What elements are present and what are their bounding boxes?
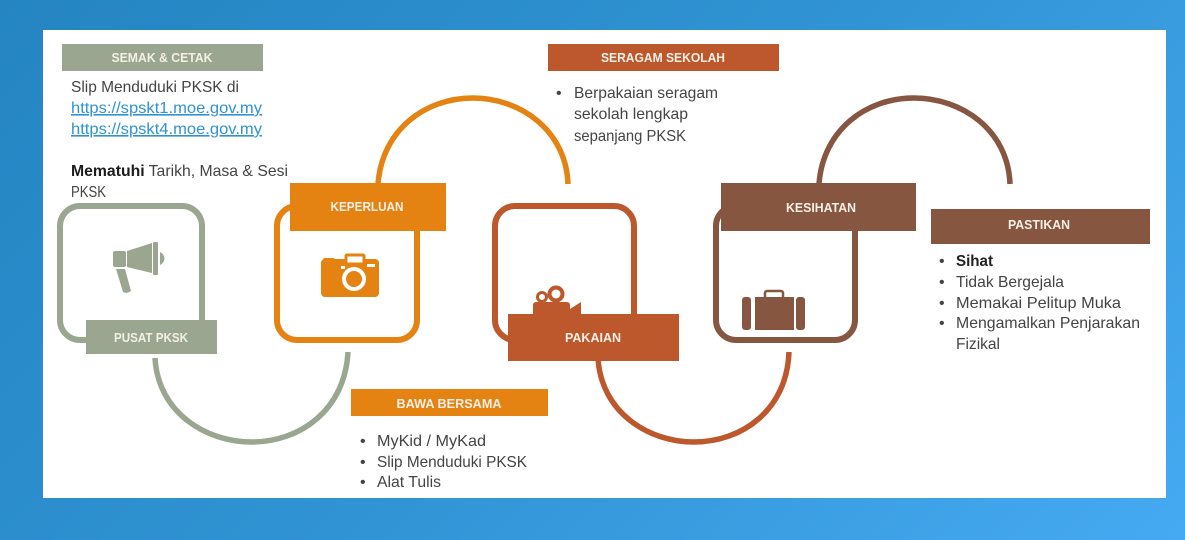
text: health checklist: Mengamalkan Penjarakan	[956, 315, 1140, 332]
label box: Pakaian: PAKAIAN	[565, 330, 621, 345]
card outline: brown	[716, 206, 855, 340]
block: Bawa Bersama	[351, 389, 548, 491]
text: slip links: Slip Menduduki PKSK di	[71, 79, 239, 96]
heading: Semak & Cetak	[62, 44, 263, 71]
heading: Seragam Sekolah: SERAGAM SEKOLAH	[601, 50, 725, 65]
text: health checklist: •	[939, 315, 945, 332]
text: health checklist: •	[939, 253, 945, 270]
label box: Kesihatan	[721, 183, 916, 231]
heading: Semak & Cetak: SEMAK & CETAK	[112, 50, 213, 65]
text: health checklist: Memakai Pelitup Muka	[956, 295, 1121, 312]
text: health checklist: Sihat	[956, 253, 994, 270]
card outline: rust	[495, 206, 634, 340]
heading: Bawa Bersama: BAWA BERSAMA	[396, 396, 502, 411]
heading: Pastikan	[931, 209, 1150, 244]
text: uniform note: sekolah lengkap	[574, 106, 688, 123]
text: slip links: https://spskt4.moe.gov.my	[71, 121, 262, 138]
text: health checklist: Fizikal	[956, 336, 1000, 353]
panel: Kesihatan	[716, 183, 916, 340]
icon: camera	[321, 255, 379, 297]
heading: Bawa Bersama	[351, 389, 548, 416]
label box: Pusat PKSK	[86, 320, 217, 354]
block: Pastikan	[931, 209, 1150, 353]
card outline: green	[60, 206, 202, 340]
label box: Pusat PKSK: PUSAT PKSK	[114, 330, 189, 345]
text: items to bring: •	[360, 474, 366, 491]
icon: film camera	[533, 288, 581, 318]
text: health checklist	[939, 253, 1140, 353]
label box: Kesihatan: KESIHATAN	[786, 200, 856, 215]
text: uniform note: •	[556, 85, 562, 102]
text: items to bring: Slip Menduduki PKSK	[377, 454, 527, 471]
connector arc: brown	[819, 98, 1010, 184]
label box: Keperluan: KEPERLUAN	[330, 199, 404, 214]
text: health checklist: •	[939, 295, 945, 312]
text: slip links: https://spskt1.moe.gov.my	[71, 100, 262, 117]
panel: Keperluan	[277, 183, 446, 340]
text: items to bring	[360, 433, 527, 491]
connector arc: rust	[598, 352, 789, 442]
text: uniform note: Berpakaian seragam	[574, 85, 718, 102]
text: items to bring: •	[360, 454, 366, 471]
text: uniform note: sepanjang PKSK	[574, 128, 686, 145]
connector arc: green	[155, 352, 348, 442]
panel: Pakaian	[495, 206, 679, 361]
text: Mematuhi	[71, 163, 288, 201]
text: health checklist: •	[939, 274, 945, 291]
connector arc: orange	[378, 98, 568, 184]
icon: suitcase	[742, 291, 805, 330]
text: items to bring: Alat Tulis	[377, 474, 441, 491]
text: uniform note	[556, 85, 718, 145]
block: Seragam Sekolah	[548, 44, 779, 145]
block: Semak & Cetak	[62, 44, 288, 201]
text: Mematuhi: Mematuhi Tarikh, Masa & Sesi	[71, 163, 288, 180]
text: items to bring: MyKid / MyKad	[377, 433, 486, 450]
icon: megaphone	[113, 242, 164, 293]
label box: Pakaian	[508, 314, 679, 361]
panel: Pusat PKSK	[60, 206, 217, 354]
text: slip links	[71, 79, 262, 138]
text: items to bring: •	[360, 433, 366, 450]
card outline: orange	[277, 206, 417, 340]
text: health checklist: Tidak Bergejala	[956, 274, 1064, 291]
heading: Pastikan: PASTIKAN	[1008, 217, 1070, 232]
text: Mematuhi: PKSK	[71, 184, 106, 201]
heading: Seragam Sekolah	[548, 44, 779, 71]
label box: Keperluan	[290, 183, 446, 231]
